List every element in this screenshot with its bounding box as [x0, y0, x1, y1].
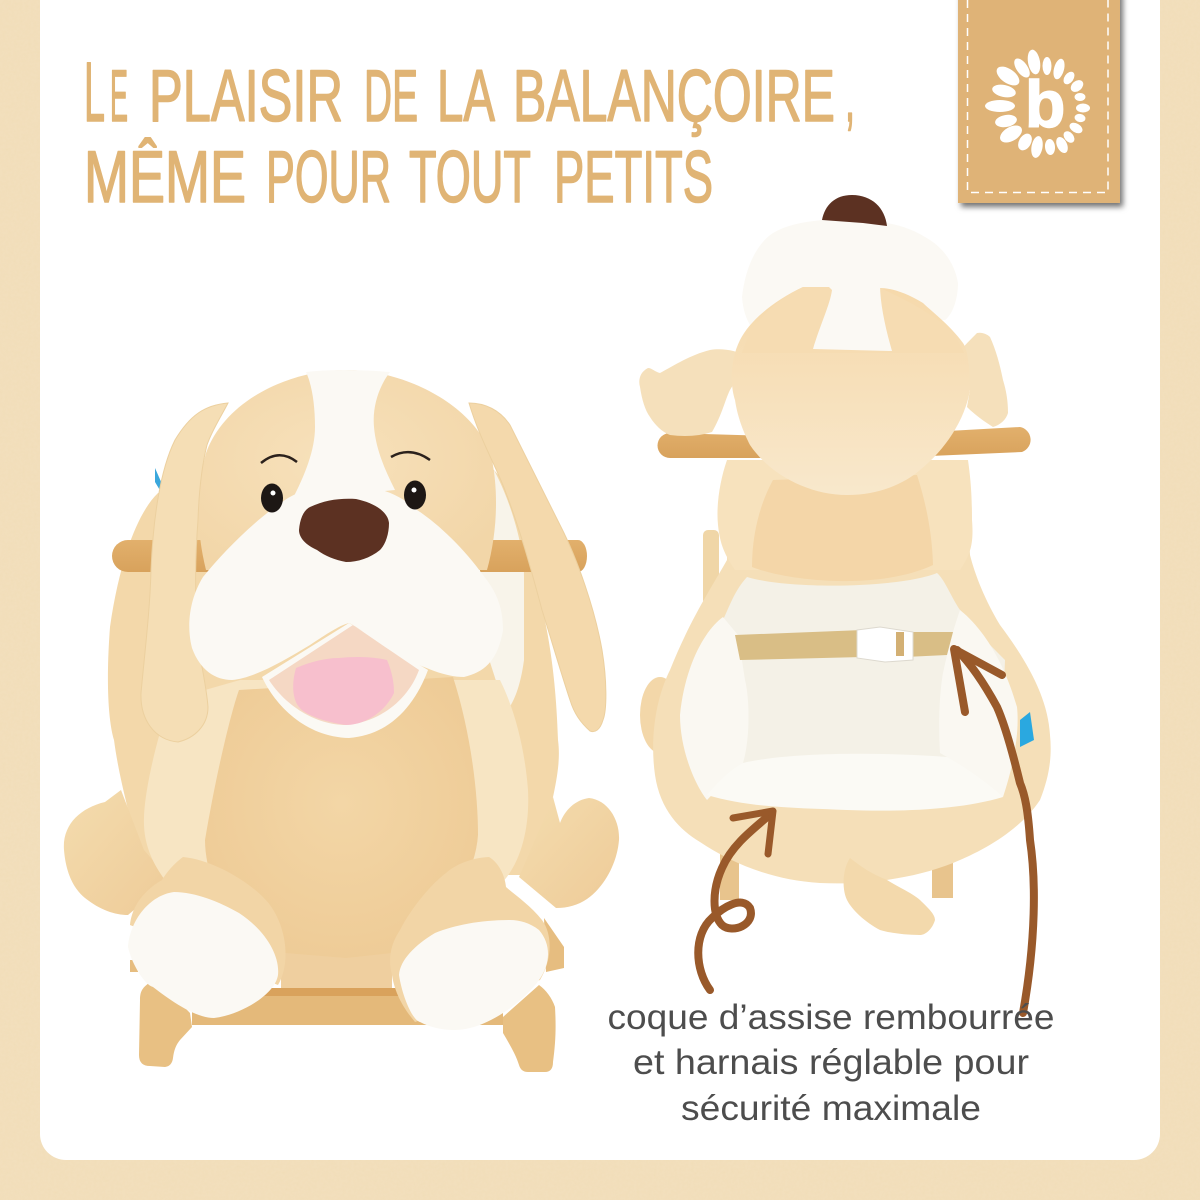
right ear	[469, 403, 606, 732]
nose	[822, 195, 887, 226]
eyebrows	[261, 452, 430, 463]
title: PETITS	[554, 137, 713, 218]
plush dog: back view	[639, 195, 1051, 935]
head	[732, 287, 970, 495]
text: ,	[845, 56, 855, 137]
eyes	[261, 480, 426, 512]
icon: flower logo: b	[1025, 67, 1065, 141]
title: DE	[364, 56, 418, 137]
brand tag	[958, 0, 1120, 203]
right ear	[955, 333, 1008, 427]
title: PLAISIR	[149, 56, 343, 137]
blue label	[155, 468, 162, 492]
wooden legs	[720, 850, 953, 900]
white blaze	[813, 278, 892, 351]
right cushion	[939, 610, 1018, 797]
title: BALANÇOIRE	[513, 56, 835, 137]
rocker side	[703, 530, 719, 605]
muzzle	[742, 220, 958, 325]
muzzle	[189, 485, 503, 680]
right foot	[390, 857, 550, 1030]
title	[84, 45, 855, 218]
title: E	[110, 56, 128, 137]
arrow: long arrow to harness	[954, 649, 1034, 1013]
caption text: sécurité maximale	[681, 1089, 981, 1128]
stitching	[968, 0, 1108, 192]
title: MÊME	[84, 137, 246, 218]
handle bar	[112, 540, 587, 572]
seat shell body	[653, 470, 1051, 883]
caption text: coque d’assise rembourrée	[608, 998, 1054, 1037]
handle bar	[658, 427, 1031, 458]
icon: flower logo	[985, 49, 1090, 159]
white back panel	[470, 470, 524, 712]
white blaze	[292, 370, 395, 500]
title: POUR	[266, 137, 391, 218]
upper back	[752, 475, 933, 581]
plush dog: front view	[64, 370, 619, 1072]
title: L	[84, 45, 105, 139]
title: TOUT	[409, 137, 531, 218]
caption text: et harnais réglable pour	[633, 1043, 1029, 1082]
title: LA	[437, 56, 495, 137]
caption text	[608, 998, 1054, 1128]
rocker base	[130, 918, 564, 1072]
seat back	[700, 573, 1005, 790]
left leg	[64, 790, 170, 915]
mouth	[262, 623, 428, 738]
belly	[205, 677, 478, 958]
buckle	[857, 627, 913, 662]
left foot	[128, 857, 286, 1018]
body front	[144, 680, 528, 885]
arrow: curled arrow to seat shell	[698, 811, 773, 990]
tongue	[293, 657, 394, 725]
left bump	[640, 677, 680, 753]
left ear	[639, 349, 750, 436]
head top	[742, 287, 964, 353]
head	[198, 370, 496, 570]
tail	[844, 858, 935, 935]
left ear	[141, 403, 228, 742]
right leg	[519, 797, 619, 908]
left cushion	[680, 617, 749, 800]
back body	[108, 470, 559, 875]
blue label	[1020, 712, 1034, 747]
seat	[707, 754, 1003, 811]
neck	[717, 460, 972, 570]
nose	[299, 499, 389, 562]
harness strap	[735, 627, 953, 662]
